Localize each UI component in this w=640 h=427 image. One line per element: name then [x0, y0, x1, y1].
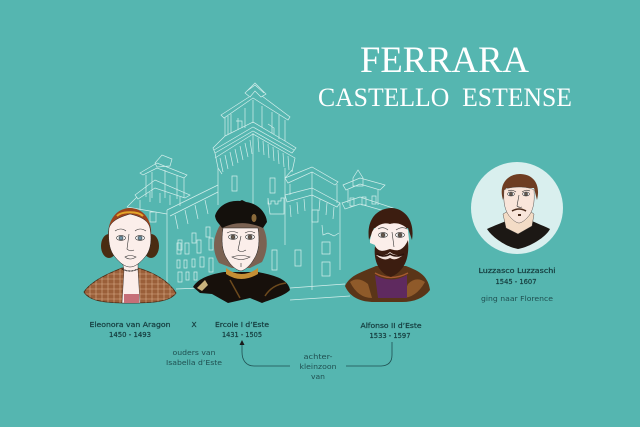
note: ouders van Isabella d'Este — [166, 348, 222, 367]
hair — [369, 208, 413, 240]
caption: Ercole I d'Este — [215, 320, 269, 339]
purple tunic — [375, 275, 407, 298]
title: CASTELLO ESTENSE — [318, 83, 572, 112]
caption: Alfonso II d'Este: Alfonso II d’Este — [360, 321, 422, 330]
captions — [90, 266, 556, 340]
collar — [226, 268, 258, 279]
hair — [502, 174, 538, 200]
face — [222, 228, 259, 271]
caption: Luzzasco Luzzaschi — [478, 266, 556, 286]
shoulder highlight — [197, 280, 208, 291]
caption: Alfonso II d'Este: 1533 - 1597 — [370, 331, 411, 340]
shoulders — [345, 266, 430, 302]
hat — [215, 200, 267, 228]
circle background — [471, 162, 563, 254]
symbol: x between spouses: X — [191, 320, 197, 329]
note: achter-kleinzoon van: kleinzoon — [300, 362, 337, 371]
jacket — [487, 218, 550, 249]
illustration: Castello Estense line drawing — [127, 83, 393, 300]
face — [504, 187, 534, 223]
cape — [84, 268, 176, 303]
neck and bodice — [122, 260, 140, 303]
headband — [117, 212, 143, 216]
face — [370, 223, 409, 258]
hat badge — [252, 214, 256, 222]
infographic canvas — [84, 48, 571, 379]
hair — [108, 208, 151, 243]
beard — [375, 240, 408, 277]
note: ouders van Isabella d'Este: Isabella d’Este — [166, 358, 222, 367]
hair — [214, 222, 267, 268]
face — [109, 214, 151, 267]
caption: Alfonso II d'Este — [360, 321, 422, 340]
caption: Eleonora van Aragon: 1450 - 1493 — [109, 330, 151, 339]
facial features — [227, 232, 255, 267]
caption: Eleonora van Aragon — [90, 320, 171, 339]
caption: Luzzasco Luzzaschi: Luzzasco Luzzaschi — [478, 266, 556, 275]
facial features — [377, 228, 407, 256]
portrait: Alfonso II d'Este — [345, 208, 430, 302]
arrow: Alfonso to Ercole — [240, 340, 392, 366]
caption: Ercole I d'Este: Ercole I d’Este — [215, 320, 269, 329]
note: achter-kleinzoon van: van — [311, 372, 325, 381]
note: ging naar Florence: ging naar Florence — [481, 294, 553, 303]
title — [318, 40, 572, 112]
shoulders — [193, 272, 290, 303]
hair buns — [101, 234, 117, 258]
caption: Ercole I d'Este: 1431 - 1505 — [222, 330, 262, 339]
facial features — [508, 190, 530, 215]
portrait: Ercole I d'Este — [193, 200, 290, 303]
note: achter-kleinzoon van: achter- — [304, 352, 333, 361]
moustache — [376, 252, 404, 259]
note: achter-kleinzoon van — [300, 352, 337, 381]
facial features — [115, 229, 146, 271]
portrait: Eleonora van Aragon — [84, 208, 176, 303]
caption: Eleonora van Aragon: Eleonora van Aragon — [90, 320, 171, 329]
title: FERRARA — [360, 40, 529, 81]
note: ouders van Isabella d'Este: ouders van — [172, 348, 216, 357]
caption: Luzzasco Luzzaschi: 1545 - 1607 — [496, 277, 537, 286]
portrait: Luzzasco Luzzaschi — [471, 162, 563, 254]
collar — [503, 210, 534, 234]
